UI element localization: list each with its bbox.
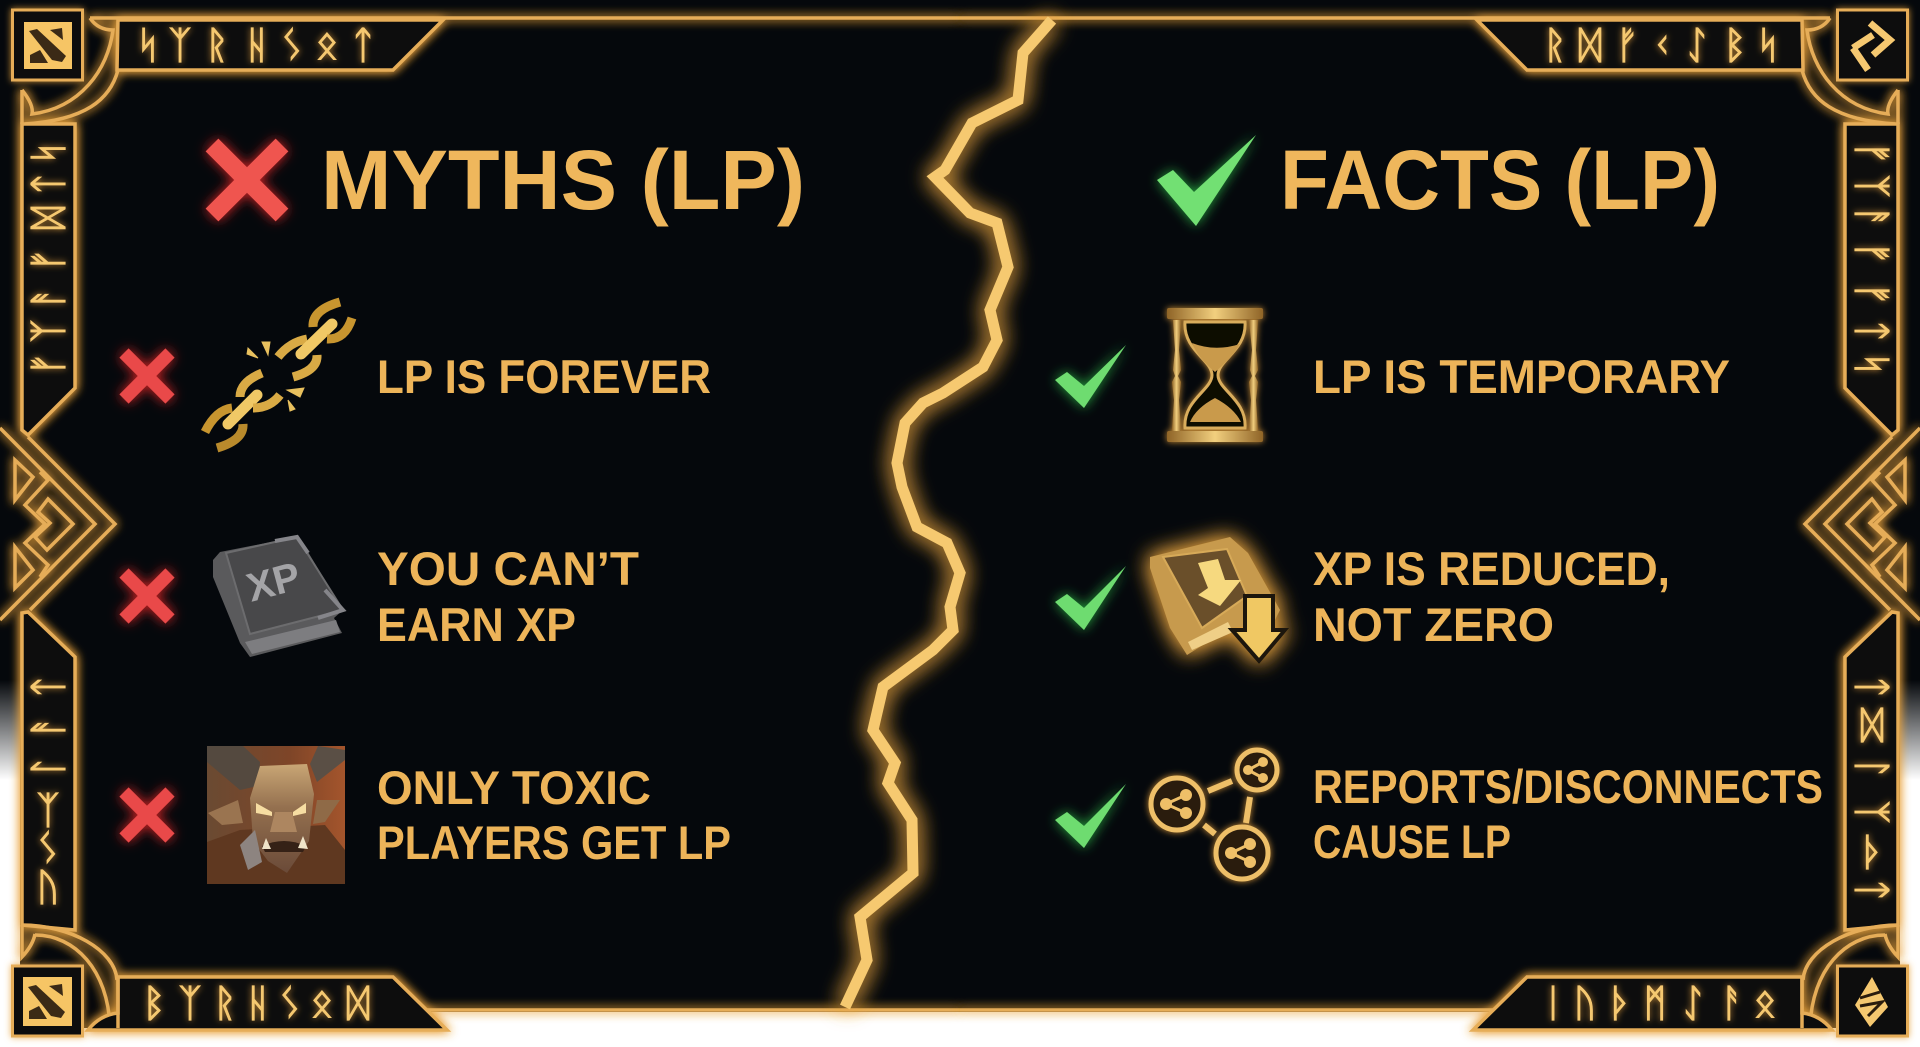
ornamental frame: right half <box>960 18 1920 1030</box>
text: you can't earn xp: EARN XP <box>377 598 576 651</box>
heading: myths: MYTHS (LP) <box>321 133 805 227</box>
rune band: right lower: ᚦ <box>1861 830 1883 874</box>
rune band: top right: ᛒ <box>1724 23 1746 67</box>
rune band: right upper: ᛉ <box>1850 175 1894 197</box>
ornamental frame: left half <box>0 18 960 1030</box>
icon: network of share nodes <box>1151 750 1277 879</box>
rune band: bottom left: ᚱ <box>214 981 236 1025</box>
lightning divider <box>845 20 1052 1007</box>
text: reports/disconnects cause lp: REPORTS/DISCONNECTS <box>1313 760 1823 813</box>
text: you can't earn xp: YOU CAN’T <box>377 542 639 595</box>
icon: broken chain <box>205 302 352 448</box>
icon: green check row 1 <box>1055 345 1126 408</box>
rune band: top left: ᛋ <box>137 23 159 67</box>
rune band: left lower: ᛉ <box>37 788 59 832</box>
icon: top-left logo square <box>12 10 82 80</box>
rune band: right lower <box>1850 676 1894 901</box>
icon: bottom-left logo square <box>12 966 82 1036</box>
rune band: top right: ᛞ <box>1579 23 1602 67</box>
text: you can't earn xp <box>377 542 639 651</box>
rune band: top right <box>1544 23 1779 67</box>
rune band: top left <box>137 23 374 67</box>
icon: hourglass <box>1167 308 1263 442</box>
icon: grey XP book <box>213 537 343 657</box>
rune band: right upper: ᛏ <box>1850 320 1894 342</box>
rune band: left lower: ᚢ <box>37 865 59 909</box>
rune band: bottom right: ᛗ <box>1644 981 1666 1025</box>
text: only toxic players get lp <box>377 761 731 869</box>
rune band: right upper: ᚠ <box>1850 283 1894 305</box>
text: only toxic players get lp: ONLY TOXIC <box>377 761 651 814</box>
rune band: bottom right: ᚢ <box>1574 981 1596 1025</box>
rune band: bottom right: ᚦ <box>1609 981 1631 1025</box>
rune band: top left: ᛊ <box>281 23 303 67</box>
rune band: right lower: ᛏ <box>1850 676 1894 698</box>
rune band: left lower: ᛏ <box>26 676 70 698</box>
text: reports/disconnects cause lp <box>1313 760 1823 868</box>
rune band: right upper: ᚨ <box>1850 206 1894 228</box>
rune band: right lower: ᛚ <box>1850 757 1894 779</box>
rune band: bottom right: ᛁ <box>1542 981 1564 1025</box>
rune band: left lower: ᚨ <box>26 716 70 738</box>
icon: red X row 1 <box>124 353 170 399</box>
icon: top-right rune square <box>1838 10 1908 80</box>
rune band: bottom right: ᛇ <box>1682 981 1704 1025</box>
rune band: left lower <box>26 676 70 909</box>
rune band: top right: ᛇ <box>1686 23 1708 67</box>
icon: gold book with down arrow <box>1150 537 1285 661</box>
rune band: left lower: ᛊ <box>37 826 59 870</box>
rune band: right upper: ᛋ <box>1850 353 1894 375</box>
rune band: bottom left: ᛉ <box>179 981 201 1025</box>
icon: grey XP book: XP <box>242 554 305 611</box>
rune band: bottom right <box>1542 981 1776 1025</box>
rune band: top right: ᛋ <box>1757 23 1779 67</box>
rune band: left upper: ᛏ <box>26 173 70 195</box>
rune band: right upper: ᚠ <box>1850 142 1894 164</box>
rune band: left upper: ᚠ <box>26 353 70 375</box>
icon: red X row 3 <box>124 792 170 838</box>
rune band: bottom right: ᛟ <box>1754 981 1776 1025</box>
icon: green check row 3 <box>1055 784 1126 848</box>
text: xp is reduced, not zero <box>1313 542 1670 651</box>
icon: green check row 2 <box>1055 566 1126 630</box>
rune band: bottom left: ᚺ <box>247 981 269 1025</box>
rune band: left upper: ᛋ <box>26 142 70 164</box>
icon: big green check <box>1157 135 1256 226</box>
rune band: right upper: ᚠ <box>1850 242 1894 264</box>
text: xp is reduced, not zero: XP IS REDUCED, <box>1313 542 1670 595</box>
rune band: right lower: ᛏ <box>1850 879 1894 901</box>
rune band: left upper: ᛞ <box>26 206 70 229</box>
rune band: top right: ᚲ <box>1651 23 1673 67</box>
icon: demon portrait <box>207 746 345 884</box>
rune band: left lower: ᛚ <box>26 756 70 778</box>
rune band: right lower: ᛉ <box>1850 801 1894 823</box>
text: only toxic players get lp: PLAYERS GET LP <box>377 816 731 869</box>
icon: bottom-right rune square <box>1838 966 1908 1036</box>
rune band: bottom left: ᛊ <box>279 981 301 1025</box>
rune band: left upper: ᚠ <box>26 249 70 271</box>
rune band: top left: ᛟ <box>316 23 338 67</box>
text: lp is temporary: LP IS TEMPORARY <box>1313 350 1730 403</box>
rune band: left upper <box>26 142 70 375</box>
text: lp is forever: LP IS FOREVER <box>377 350 711 403</box>
rune band: left upper: ᚨ <box>26 287 70 309</box>
text: reports/disconnects cause lp: CAUSE LP <box>1313 815 1511 868</box>
heading: facts: FACTS (LP) <box>1280 133 1720 227</box>
rune band: top left: ᛏ <box>352 23 374 67</box>
icon: red X row 2 <box>124 573 170 619</box>
rune band: right lower: ᛞ <box>1861 703 1884 747</box>
rune band: top right: ᚠ <box>1616 23 1638 67</box>
rune band: top left: ᚱ <box>206 23 228 67</box>
rune band: left upper: ᛉ <box>26 320 70 342</box>
rune band: bottom left: ᛞ <box>347 981 370 1025</box>
rune band: top left: ᚺ <box>246 23 268 67</box>
rune band: top left: ᛉ <box>169 23 191 67</box>
rune band: bottom left <box>143 981 370 1025</box>
rune band: right upper <box>1850 142 1894 375</box>
rune band: bottom right: ᚨ <box>1721 981 1743 1025</box>
rune band: bottom left: ᛟ <box>311 981 333 1025</box>
rune band: bottom left: ᛒ <box>143 981 165 1025</box>
rune band: top right: ᚱ <box>1544 23 1566 67</box>
text: xp is reduced, not zero: NOT ZERO <box>1313 598 1554 651</box>
icon: big red X <box>212 145 282 215</box>
